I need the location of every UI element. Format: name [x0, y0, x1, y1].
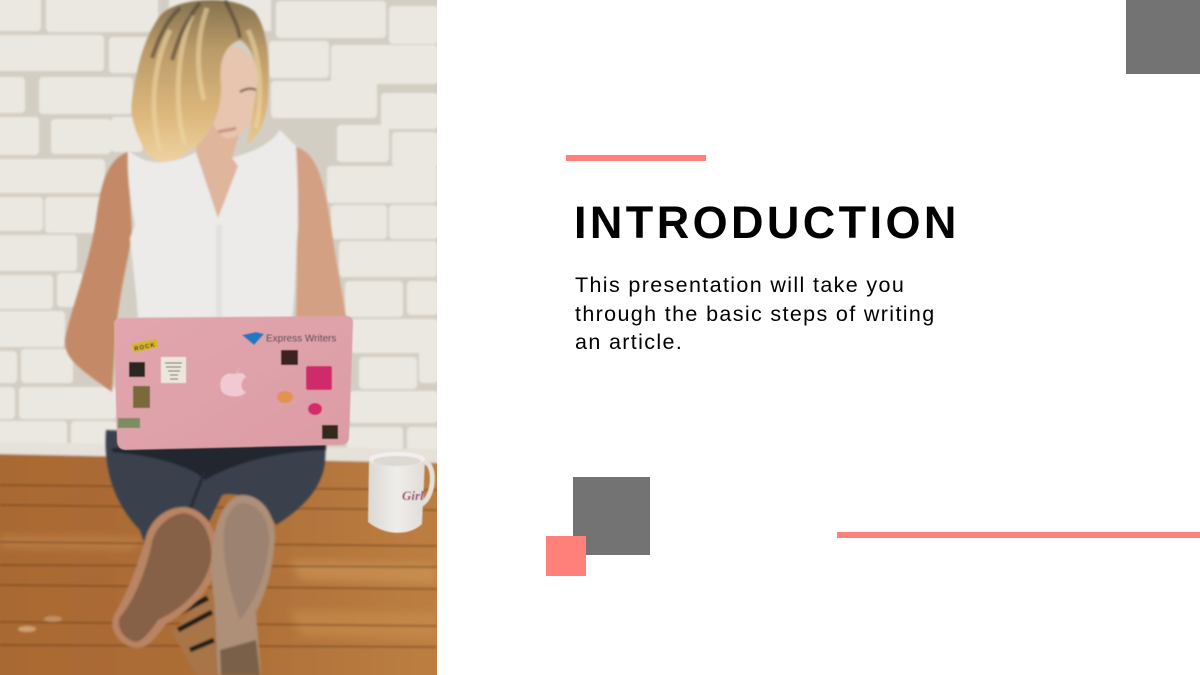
apple logo: [220, 366, 246, 396]
right arm: [296, 147, 346, 318]
neck and chest: [196, 125, 242, 218]
left arm: [65, 152, 132, 392]
left shoe sole: [112, 507, 218, 648]
body text: [575, 273, 936, 354]
stickers: [118, 338, 338, 439]
coral line bottom right: [837, 532, 1200, 538]
top-right grey square: [1126, 0, 1200, 74]
right shoe sole: [211, 495, 275, 675]
ankle straps: [172, 590, 218, 675]
coral accent bar above title: [566, 155, 706, 161]
body text: through the basic steps of writing: [575, 302, 936, 326]
stickers: ROCK: [134, 342, 156, 353]
brick wall: [0, 0, 442, 465]
wooden floor: [0, 442, 442, 675]
face: [211, 47, 260, 138]
blouse: [128, 130, 298, 318]
logo text: Express Writers: [266, 334, 336, 344]
body text: an article.: [575, 330, 683, 354]
title: INTRODUCTION: [574, 196, 960, 248]
body text: This presentation will take you: [575, 273, 905, 297]
leggings: [106, 430, 326, 560]
coral square: [546, 536, 586, 576]
coffee mug: Girl: [402, 488, 424, 503]
logo arrow: [242, 332, 264, 345]
grey square: [573, 477, 650, 555]
woman: [65, 0, 346, 675]
decorative overlapping squares: [546, 477, 650, 576]
blonde hair: [131, 0, 269, 162]
pink laptop with stickers: [114, 316, 353, 450]
photo: woman with pink laptop sitting against a brick wall: [0, 0, 437, 675]
coffee mug: [368, 452, 432, 533]
